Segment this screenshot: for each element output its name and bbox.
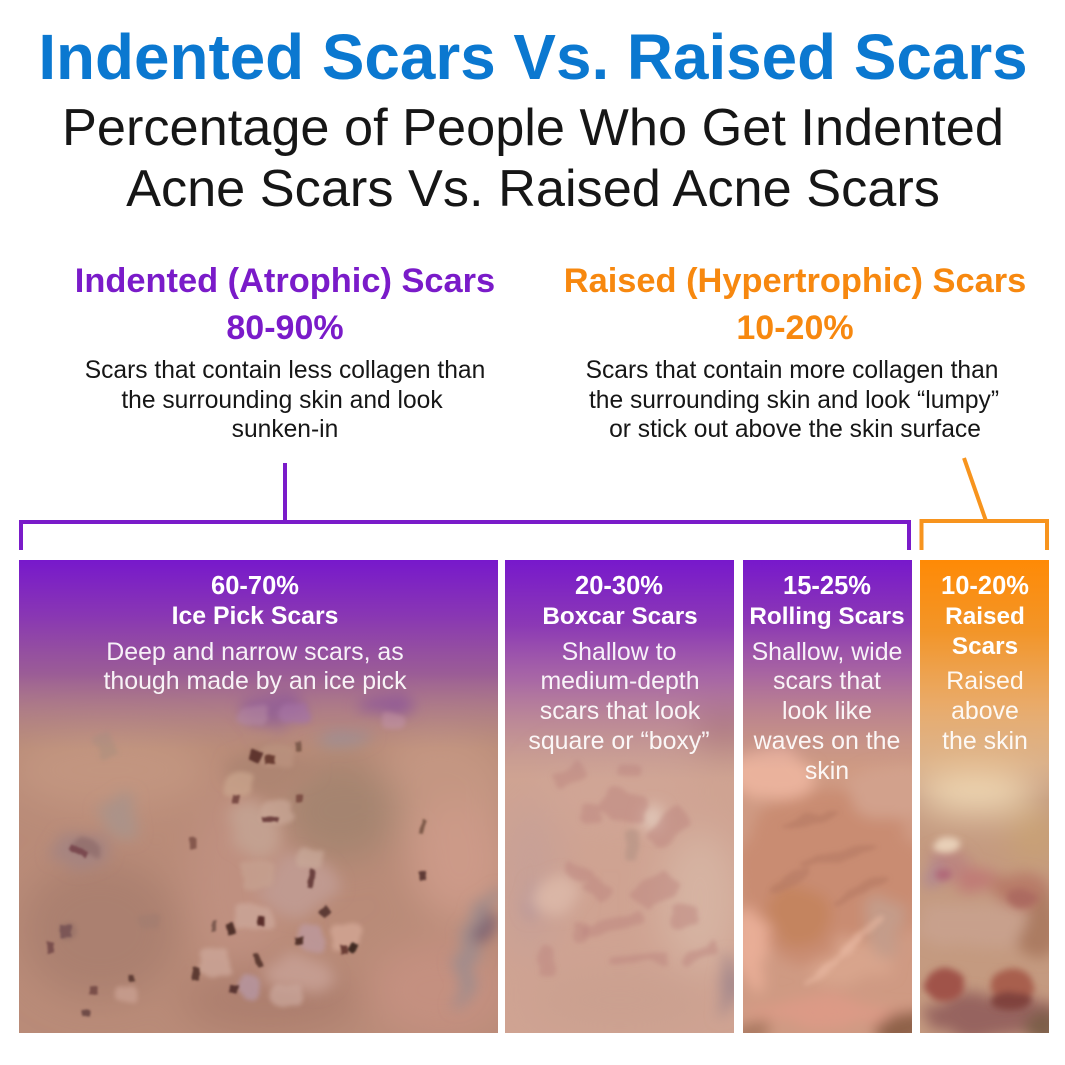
- label: ice pick scars: Deep and narrow scars, as: [106, 638, 404, 666]
- text block: indented scars summary: [75, 262, 495, 443]
- panel: ice pick scars: [10, 560, 510, 1040]
- label: rolling scars: Shallow, wide: [752, 638, 902, 666]
- label: rolling scars: [749, 572, 905, 785]
- label: boxcar scars: Shallow to: [562, 638, 676, 666]
- label: ice pick scars: [103, 572, 407, 695]
- subtitle: Percentage of People Who Get Indented: [62, 99, 1004, 157]
- label: raised scars: Scars: [952, 633, 1018, 660]
- bracket: indented scars: [21, 463, 909, 550]
- label: raised scars: above: [951, 697, 1019, 725]
- text block: raised scars summary: the surrounding skin and look “lumpy”: [589, 387, 999, 414]
- label: boxcar scars: medium-depth: [540, 667, 700, 695]
- text block: indented scars summary: sunken-in: [232, 416, 338, 443]
- label: boxcar scars: square or “boxy”: [528, 727, 710, 755]
- label: rolling scars: skin: [805, 757, 849, 785]
- label: ice pick scars: Ice Pick Scars: [172, 603, 338, 630]
- label: raised scars: the skin: [942, 727, 1028, 755]
- label: rolling scars: Rolling Scars: [749, 603, 905, 630]
- label: ice pick scars: though made by an ice pick: [103, 667, 407, 695]
- text block: indented scars summary: Scars that contain less collagen than: [85, 357, 485, 384]
- text block: raised scars summary: Raised (Hypertrophic) Scars: [564, 262, 1026, 300]
- label: boxcar scars: Boxcar Scars: [542, 603, 698, 630]
- bracket: raised scars: [922, 458, 1047, 550]
- label: boxcar scars: 20-30%: [575, 572, 663, 600]
- main heading: Indented Scars Vs. Raised Scars: [38, 21, 1028, 93]
- label: rolling scars: waves on the: [753, 727, 900, 755]
- label: raised scars: Raised: [945, 603, 1025, 630]
- text block: indented scars summary: 80-90%: [226, 309, 344, 347]
- label: rolling scars: look like: [782, 697, 872, 725]
- text block: indented scars summary: Indented (Atrophic) Scars: [75, 262, 495, 300]
- text block: raised scars summary: or stick out above the skin surface: [609, 416, 981, 443]
- panel: boxcar scars: [505, 560, 734, 1033]
- panel: raised scars: [920, 560, 1049, 1033]
- text block: indented scars summary: the surrounding skin and look: [121, 387, 443, 414]
- label: raised scars: Raised: [946, 667, 1024, 695]
- label: raised scars: 10-20%: [941, 572, 1029, 600]
- label: rolling scars: scars that: [773, 667, 881, 695]
- label: boxcar scars: [528, 572, 710, 755]
- text block: raised scars summary: 10-20%: [736, 309, 854, 347]
- label: rolling scars: 15-25%: [783, 572, 871, 600]
- text block: raised scars summary: [564, 262, 1026, 443]
- label: ice pick scars: 60-70%: [211, 572, 299, 600]
- panel: rolling scars: [743, 560, 912, 1033]
- title: Acne Scars Vs. Raised Acne Scars: [126, 160, 940, 218]
- text block: raised scars summary: Scars that contain more collagen than: [586, 357, 998, 384]
- label: raised scars: [941, 572, 1029, 755]
- label: boxcar scars: scars that look: [540, 697, 701, 725]
- title: [38, 21, 1028, 218]
